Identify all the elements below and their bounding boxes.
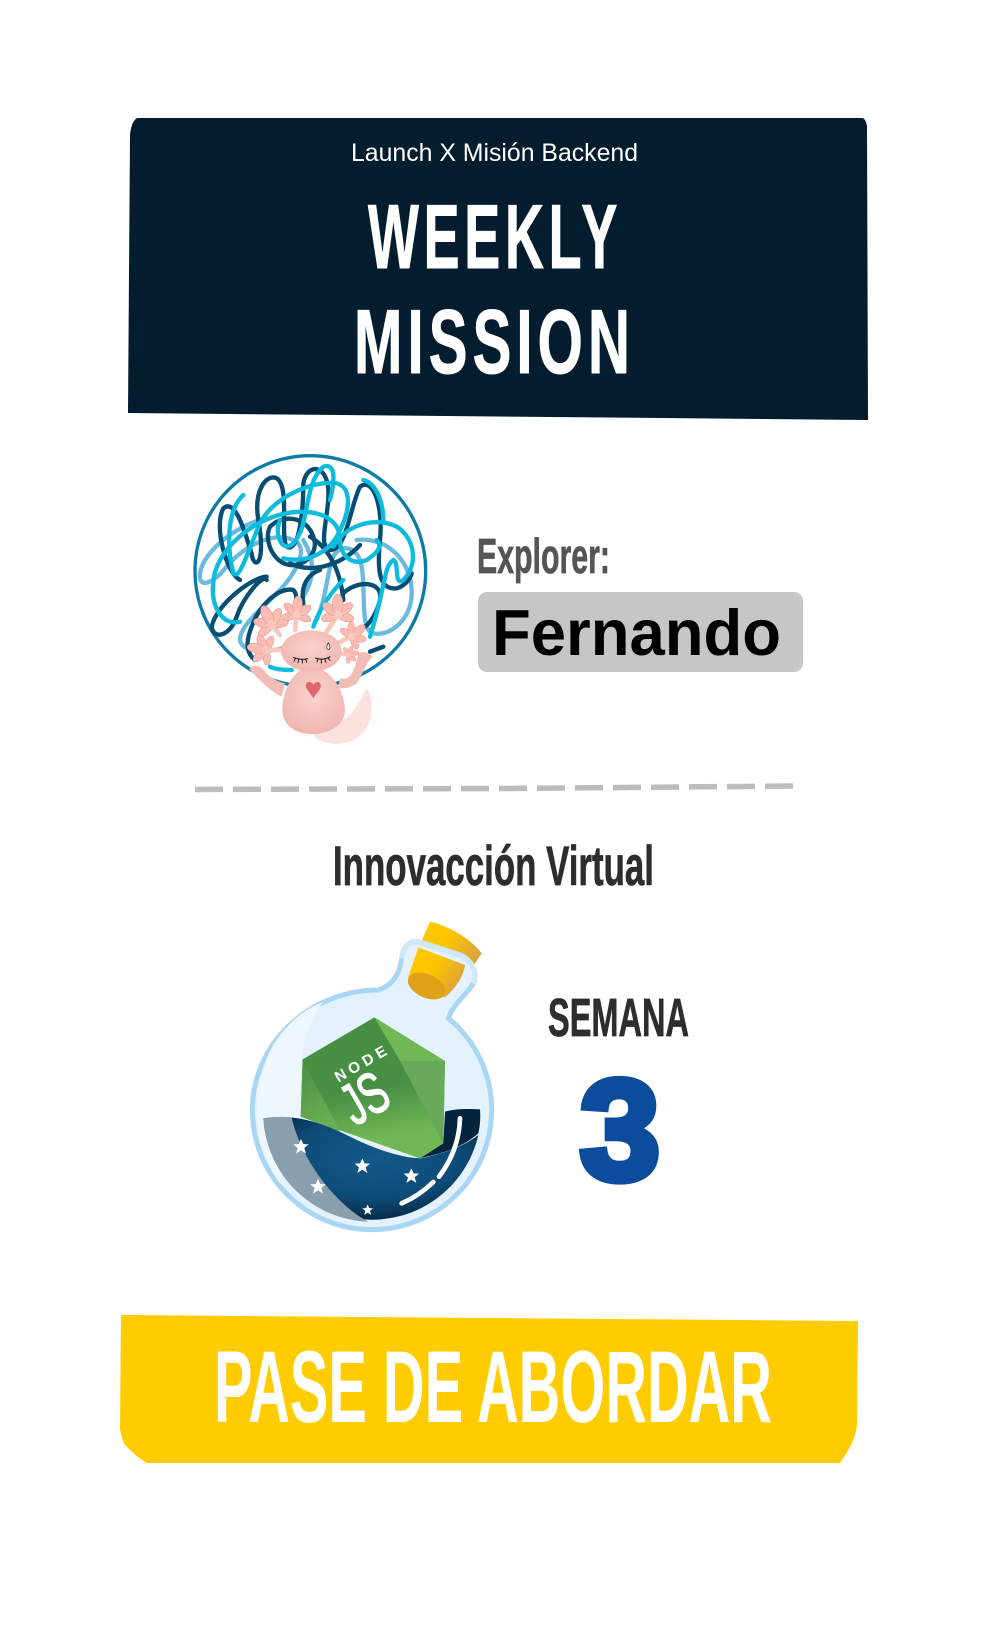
illustration: node.js flask <box>252 922 492 1230</box>
highlight arcs <box>402 1118 460 1203</box>
tail <box>313 688 372 744</box>
name: Fernando <box>492 596 781 669</box>
js label: JS <box>329 1059 400 1138</box>
title line: weekly: WEEKLY <box>368 187 622 288</box>
week number: 3 <box>580 1051 660 1210</box>
arms <box>249 652 373 697</box>
title line: mission: MISSION <box>354 292 635 393</box>
scribbles <box>200 466 413 670</box>
sweat drop <box>327 643 330 649</box>
node label: NODE <box>332 1041 394 1086</box>
stars <box>293 1139 419 1215</box>
subtitle: Launch X Misión Backend <box>351 139 638 167</box>
water shadow <box>263 1117 368 1222</box>
water back <box>420 1109 480 1158</box>
flask <box>252 942 492 1230</box>
week label: SEMANA <box>548 988 689 1048</box>
heading: innovaccion virtual: Innovacción Virtual <box>333 834 654 897</box>
water <box>263 1117 478 1220</box>
scribble ball outline <box>195 456 426 686</box>
header banner <box>128 118 868 420</box>
cork <box>408 947 465 997</box>
glass highlight <box>257 1002 323 1183</box>
week block <box>548 988 689 1210</box>
head <box>281 630 342 672</box>
name box <box>478 592 803 672</box>
node hexagon <box>301 1017 445 1158</box>
cork back <box>418 922 482 968</box>
body <box>282 667 345 734</box>
eyes <box>293 657 330 663</box>
label: explorer: Explorer: <box>477 530 610 584</box>
heart <box>306 682 321 698</box>
boarding pass band <box>120 1315 858 1463</box>
gills <box>245 594 374 667</box>
illustration: axolotl with scribble ball <box>195 456 426 744</box>
axolotl <box>245 594 374 744</box>
